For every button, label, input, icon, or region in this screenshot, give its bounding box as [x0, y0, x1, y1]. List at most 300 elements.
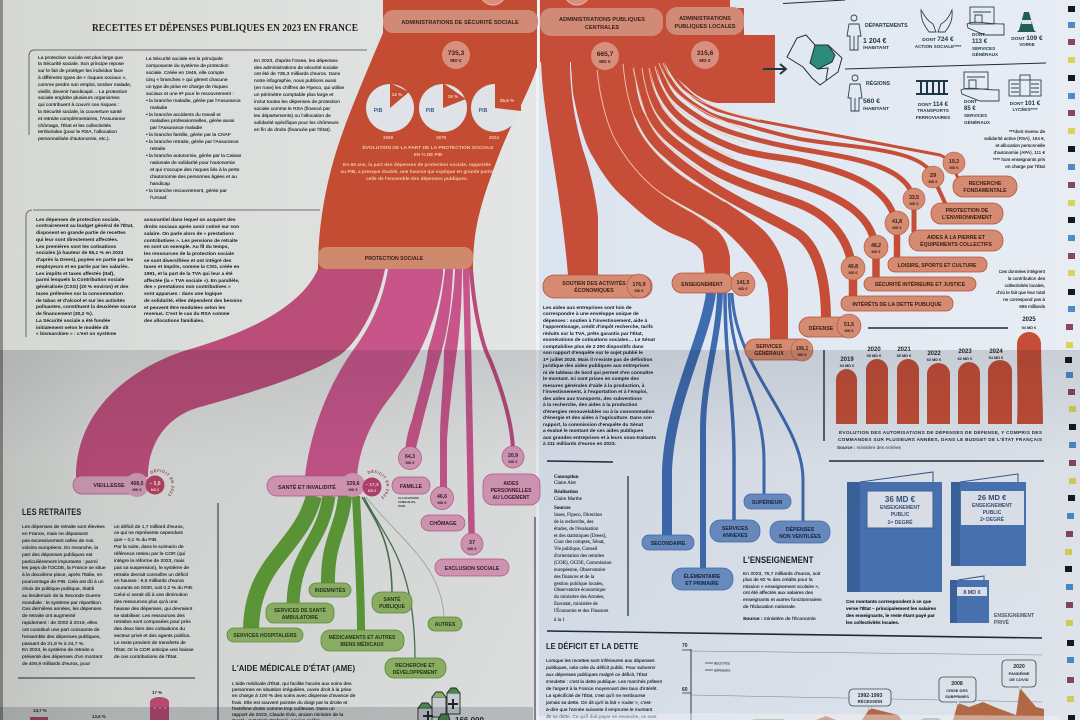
- text block: credits and sources: Insee, Fipeco, Direction: [554, 513, 602, 518]
- pill: exclusion sociale: [435, 533, 509, 576]
- label: action sociale: [915, 36, 961, 49]
- legend: RECETTES: [714, 662, 730, 666]
- text block: financing column 2: assurantiel dans lequel on acquiert des droits sociaux après avoir cotisé sur son salaire. On parle alors de « prestations contributives ». Les pensions de retraite en sont un exemple. Au fil du temps, les ressources de la protection sociale se sont diversifiées et ont intégré des taxes et impôts, comme la CSG, créée en 1991, et la part de la TVA qui leur a été affectée (la « TVA sociale »). En parallèle, des « prestations non contributives » sont apparues : dans une logique de solidarité, elles dépendent des besoins et peuvent être modulées selon les revenus. C'est le cas du RSA comme des allocations familiales.: [144, 218, 242, 324]
- chart caption: Source : ministère des Armées: [837, 445, 902, 450]
- label: transports ferroviaires: DONT 114 €: [918, 101, 949, 108]
- value: 315,6: 315,6: [697, 50, 714, 57]
- pill: médicaments: [321, 630, 404, 651]
- bar 2022: [927, 363, 950, 424]
- label: voirie: VOIRIE: [1019, 42, 1035, 47]
- bar 2019: [836, 369, 857, 424]
- retirement bars: 13,6 %: [92, 714, 106, 719]
- registration colour strip: [1065, 6, 1076, 720]
- label: services généraux région: 85 €: [964, 106, 976, 112]
- pill: famille: 64,3: [405, 454, 415, 460]
- heading: aide médicale d'état: L'AIDE MÉDICALE D'ÉTAT (AME): [232, 663, 355, 673]
- flow: enseignement: [571, 55, 730, 275]
- pill: soutien des activités économiques: [543, 274, 652, 298]
- text block: credits and sources: des finances et de la: [554, 575, 594, 580]
- callout: 2020: DE COVID: [1009, 677, 1029, 682]
- pill: aides personnelles au logement: AIDES: [503, 481, 519, 487]
- flow: services généraux: [597, 55, 788, 341]
- pill: famille: FAMILIALES,: [398, 500, 416, 504]
- pill: administrations publiques locales: ADMINISTRATIONS: [679, 16, 731, 22]
- pill: famille: PAJE: [398, 504, 405, 508]
- icon: traffic cone: [1017, 12, 1036, 32]
- text block: credits and sources: gestion publique locales,: [554, 582, 604, 587]
- pill: recherche fondamentale: RECHERCHE: [969, 181, 1002, 187]
- pill: élémentaire et primaire: [672, 568, 733, 590]
- chart caption: [837, 428, 1042, 450]
- book: enseignement public 2e degré: PUBLIC: [983, 510, 1002, 516]
- value: 665,7: 665,7: [597, 51, 614, 58]
- text block: credits and sources: européenne, Observatoire: [554, 568, 605, 573]
- pill: services généraux: [745, 339, 813, 361]
- pill: santé et invalidité with deficit: SANTÉ ET INVALIDITÉ: [278, 483, 336, 491]
- pill: loisirs, sports et culture: LOISIRS, SPORTS ET CULTURE: [898, 263, 977, 269]
- pill: protection sociale: PROTECTION SOCIALE: [365, 256, 424, 262]
- pill: chômage: 46,6: [437, 494, 447, 500]
- pill: recherche fondamentale: 19,3: [949, 159, 959, 165]
- pill: protection de l'environnement: [922, 166, 1003, 224]
- label: action sociale: DONT 724 €: [922, 36, 954, 43]
- pill: santé et invalidité with deficit: 329,6: [347, 481, 360, 487]
- pill: enseignement: [672, 272, 755, 296]
- label: régions: [863, 79, 890, 112]
- pill: secondaire: SECONDAIRE: [651, 541, 686, 547]
- callout: 1992-1993: [849, 689, 891, 710]
- callout: 1992-1993: 1992-1993: [858, 693, 883, 699]
- note: données locales: Ces données intègrent la contribution des collectivités locales, d'où le fait que leur total ne correspond pas à 665 milliards: [996, 269, 1045, 309]
- pie chart: share of GDP 1978: [419, 83, 467, 140]
- callout: 2008: CRISE DES: [946, 688, 968, 693]
- pill: services annexes: [710, 520, 760, 542]
- label: lycées: LYCÉES****: [1012, 105, 1038, 112]
- pill: aides à la pierre: MD €: [909, 202, 919, 206]
- pill: vieillesse with deficit: [72, 468, 174, 497]
- pill: santé et invalidité with deficit: DÉFICIT EN 2023: [368, 470, 390, 499]
- text block: credits and sources: du ministère des Armées,: [554, 595, 605, 600]
- pill: aides à la pierre: AIDES À LA PIERRE ET: [927, 234, 986, 241]
- pill: indemnités: INDEMNITÉS: [315, 586, 346, 594]
- note: book amounts: Ces montants correspondent à ce que verse l'État – principalement les salaires des enseignants, le reste étant payé par les collectivités locales.: [846, 599, 936, 625]
- pill: exclusion sociale: EXCLUSION SOCIALE: [445, 566, 500, 572]
- flow: central and local public administrations trunk: [540, 0, 775, 103]
- text block: credits and sources: et des statistiques (Drees),: [554, 534, 606, 539]
- pill: services annexes: ANNEXES: [722, 533, 748, 539]
- heading: l'enseignement: L'ENSEIGNEMENT: [743, 555, 814, 565]
- pill: défense: [799, 314, 861, 338]
- bar 2024: [988, 360, 1012, 424]
- book: enseignement public 2e degré: ENSEIGNEMENT: [972, 503, 1012, 509]
- pill: sécurité intérieure et justice: SÉCURITÉ INTÉRIEURE ET JUSTICE: [875, 280, 966, 288]
- label: départements: [863, 21, 908, 51]
- pill: intérêts de la dette publique: INTÉRÊTS DE LA DETTE PUBLIQUE: [852, 300, 942, 308]
- flow separators: [597, 63, 760, 228]
- pill: administrations publiques centrales: CENTRALES: [585, 25, 619, 31]
- pill: chômage: CHÔMAGE: [429, 519, 457, 527]
- pill: services annexes: SERVICES: [722, 526, 749, 532]
- pill: défense: 51,5: [844, 322, 854, 328]
- pill: santé et invalidité with deficit: MD €: [368, 489, 376, 493]
- icon: hand holding building 2: [961, 72, 999, 101]
- pill: soutien des activités économiques: ÉCONOMIQUES: [574, 286, 614, 294]
- pill: aides personnelles au logement: PERSONNELLES: [491, 488, 532, 494]
- pie chart: share of GDP 1978: PIB: [426, 108, 435, 114]
- pill: indemnités: [309, 583, 351, 597]
- pill: protection sociale: [318, 247, 473, 269]
- pill: santé et invalidité with deficit: MD €: [348, 488, 358, 492]
- label: services généraux: GÉNÉRAUX: [972, 50, 999, 57]
- text block: credits and sources: l'Économie et des Finances: [554, 609, 608, 614]
- pill: services de santé ambulatoire: SERVICES DE SANTÉ: [274, 606, 327, 614]
- bar labels: 2024: [989, 349, 1003, 355]
- pill: protection de l'environnement: L'ENVIRONNEMENT: [942, 215, 993, 221]
- pill: services de santé ambulatoire: [266, 603, 334, 623]
- callout: 1992-1993: RÉCESSION: [858, 699, 882, 704]
- pill: soutien des activités économiques: 176,9: [633, 282, 646, 288]
- pill: vieillesse with deficit: MD €: [151, 488, 159, 492]
- pill: protection de l'environnement: PROTECTION DE: [946, 208, 989, 214]
- bar labels: 65 MD €: [897, 353, 912, 358]
- note: dont revenu de solidarité: ***dont revenu de solidarité active (RSA), 164 €, et allocation personnelle d'autonomie (APA), 111 € **** hors enseignants pris en charge par l'État: [984, 129, 1045, 169]
- pill: exclusion sociale: 37: [469, 540, 475, 546]
- bar labels: 94 MD €: [1022, 325, 1037, 330]
- value: 735,3: MD €: [450, 58, 462, 64]
- text block: Insee figures: En 2023, d'après l'Insee, les dépenses des administrations de sécurité sociale ont été de 735,3 milliards d'euros. Dans notre infographie, nous publions aussi (en rose) les chiffres de Fipeco, qui utilise un périmètre comptable plus large et inclut toutes les dépenses de protection sociale comme le RSA (financé par les départements) ou l'allocation de solidarité spécifique pour les chômeurs en fin de droits (financée par l'État).: [254, 59, 344, 133]
- text block: credits and sources: (COR), OCDE, Commission: [554, 561, 612, 566]
- flow: santé et invalidité: [305, 269, 443, 476]
- flow: exclusion sociale: [466, 269, 472, 555]
- pill: médicaments: BIENS MÉDICAUX: [340, 640, 384, 648]
- bar 2025: [1017, 332, 1043, 424]
- text block: credits and sources: Eurostat, ministère de: [554, 602, 598, 607]
- pie chart: share of GDP 1959: [366, 83, 414, 140]
- label: départements: DÉPARTEMENTS: [865, 21, 908, 29]
- pill: aides personnelles au logement: [483, 446, 540, 505]
- pill: enseignement: ENSEIGNEMENT: [681, 282, 724, 288]
- text block: retraites column 1: Les dépenses de retraite sont élevées en France, mais ne dépassent pas excessivement celles de nos voisins européens. En revanche, la part des dépenses publiques est particulièrement importante : parmi les pays de l'OCDE, la France se situe à la deuxième place, après l'Italie, en pourcentage de PIB. Cela est dû à un choix de politique publique, établi au lendemain de la Seconde Guerre mondiale : le système par répartition. Ces dernières années, les dépenses de retraite ont augmenté rapidement : de 2002 à 2019, elles ont constitué une part croissante de l'ensemble des dépenses publiques, passant de 21,8 % à 24,7 %. En 2024, le système de retraite a présenté des dépenses d'un montant de 406,9 milliards d'euros, pour: [22, 525, 106, 667]
- blue pills: education categories: [642, 494, 830, 590]
- retirement bars: 17 %: [152, 690, 162, 695]
- value: 735,3: [442, 41, 470, 69]
- bar 2020: [866, 359, 888, 424]
- pill: administrations de sécurité sociale: ADMINISTRATIONS DE SÉCURITÉ SOCIALE: [401, 18, 519, 26]
- pill: administrations publiques centrales: ADMINISTRATIONS PUBLIQUES: [559, 17, 645, 23]
- icon: school building: [1009, 75, 1041, 96]
- pill: services généraux: MD €: [797, 353, 807, 357]
- bar labels: 62 MD €: [958, 356, 973, 361]
- pill: administrations publiques locales: [666, 7, 744, 35]
- pill: administrations publiques centrales: [540, 8, 663, 36]
- pill: supérieur: SUPÉRIEUR: [752, 498, 782, 506]
- pill: exclusion sociale: MD €: [467, 547, 477, 551]
- pill: recherche et développement: DÉVELOPPEMENT: [393, 668, 437, 676]
- bar labels: 2019: [840, 357, 854, 363]
- label: transports ferroviaires: FERROVIAIRES: [916, 115, 950, 120]
- icon: person département: [847, 15, 861, 50]
- book: enseignement public 1er degré: ENSEIGNEMENT: [880, 505, 920, 511]
- pill: services de santé ambulatoire: AMBULATOIRE: [282, 615, 319, 621]
- arrow to map: [763, 64, 786, 74]
- book: enseignement privé: 8 MD €: [963, 590, 981, 596]
- icon: AME clipboards: [418, 688, 460, 720]
- pill: médicaments: MÉDICAMENTS ET AUTRES: [329, 633, 396, 641]
- pill: autres: AUTRES: [435, 622, 456, 628]
- pie charts caption: au PIB, a presque doublé, une hausse qui explique en grande partie: [340, 169, 494, 174]
- blue flows: enseignement breakdown: [667, 293, 803, 569]
- callout: 2020: PANDÉMIE: [1009, 671, 1030, 676]
- pill: recherche fondamentale: FONDAMENTALE: [963, 188, 1007, 194]
- pie charts caption: ÉVOLUTION DE LA PART DE LA PROTECTION SOCIALE: [362, 143, 494, 150]
- debt chart: [682, 643, 1044, 720]
- book: enseignement public 2e degré: 26 MD €: [978, 493, 1007, 502]
- chart caption: ÉVOLUTION DES AUTORISATIONS DE DÉPENSES DE DÉFENSE, Y COMPRIS DES: [839, 428, 1042, 435]
- pill: services généraux: 106,1: [796, 346, 808, 352]
- pill: aides personnelles au logement: 20,9: [508, 453, 518, 459]
- bar 2021: [897, 359, 919, 424]
- text block: credits and sources: Claire Alet: [554, 481, 576, 486]
- pill: vieillesse with deficit: – 5,8: [149, 481, 161, 487]
- pill: aides personnelles au logement: MD €: [508, 460, 518, 464]
- pill: vieillesse with deficit: MD €: [132, 488, 142, 492]
- pill: dépenses non ventilées: [770, 521, 830, 543]
- source: enseignement: Source : ministère de l'Économie: [743, 617, 816, 622]
- text block: credits and sources: [554, 474, 612, 623]
- chart caption: COMMANDES SUR PLUSIEURS ANNÉES, DANS LE BUDGET DE L'ÉTAT FRANÇAIS: [838, 435, 1042, 442]
- text block: credits and sources: Cour des comptes, Sénat,: [554, 540, 605, 545]
- text block: credits and sources: Sources: [554, 506, 571, 511]
- pill: vieillesse with deficit: DÉFICIT EN 2023: [150, 468, 174, 496]
- text block: credits and sources: d'orientation des retraites: [554, 554, 604, 559]
- pill: administrations de sécurité sociale: [383, 10, 538, 33]
- flow: famille: [405, 269, 453, 458]
- text block: credits and sources: études, de l'évaluation: [554, 527, 598, 532]
- text block: credits and sources: Observatoire économique: [554, 588, 606, 593]
- label: régions: /HABITANT: [863, 106, 889, 112]
- pill: recherche et développement: RECHERCHE ET: [395, 663, 435, 669]
- value: 665,7: MD €: [599, 59, 611, 65]
- legend: [705, 662, 730, 672]
- title: RECETTES ET DÉPENSES PUBLIQUES EN 2023 EN FRANCE: [92, 22, 358, 34]
- pill: supérieur: [744, 494, 791, 509]
- flows: other central and local expenditure: [628, 55, 958, 320]
- bar labels: 60 MD €: [927, 357, 942, 362]
- text block: credits and sources: de la recherche, des: [554, 520, 593, 525]
- pill: recherche fondamentale: [943, 152, 1017, 197]
- pill: santé publique: [372, 592, 412, 613]
- deficit areas: [816, 688, 1044, 720]
- pill: intérêts de la dette publique: 49,8: [848, 264, 858, 270]
- label: services généraux région: DONT: [964, 99, 977, 104]
- value: 735,3: 735,3: [448, 50, 465, 57]
- pill: dépenses non ventilées: NON VENTILÉES: [779, 532, 821, 540]
- retirement bars: 14,7 %: [33, 708, 47, 713]
- label: transports ferroviaires: [916, 101, 950, 120]
- label: services généraux: 113 €: [972, 38, 988, 45]
- debt chart: 60: [682, 687, 688, 693]
- text block: protection sociale definition: La protection sociale est plus large que la Sécurité sociale. Son principe repose sur le fait de protéger les individus face à différents types de « risques sociaux », comme perdre son emploi, tomber malade, vieillir, devenir handicapé… La protection sociale englobe plusieurs organismes qui contribuent à couvrir ces risques : la Sécurité sociale, la couverture santé et retraite complémentaires, l'Assurance chômage, l'État et les collectivités territoriales (pour le RSA, l'allocation personnalisée d'autonomie, etc.).: [38, 56, 131, 142]
- pill: recherche et développement: [385, 658, 446, 678]
- callout: 2020: 2020: [1013, 664, 1025, 670]
- bar labels: 2021: [897, 347, 911, 353]
- pill: famille: FAMILLE: [400, 484, 423, 490]
- legend: DÉPENSES: [714, 668, 730, 672]
- text block: aides aux entreprises: Les aides aux entreprises sont loin de correspondre à une enveloppe unique de dépenses : soutien à l'investissement, aide à l'apprentissage, crédit d'impôt recherche, tarifs réduits sur la TVA, prêts garantis par l'État, exonérations de cotisations sociales… Le Sénat comptabilise plus de 2 200 dispositifs dans son rapport d'enquête sur le sujet publié le 1ᵉʳ juillet 2025. Mais il n'existe pas de définition juridique des aides publiques aux entreprises ni de tableau de bord qui permet d'en connaître le montant. Ici sont prises en compte des mesures générales d'aide à la production, à l'investissement, à l'exportation et à l'emploi, des aides aux transports, des subventions à la recherche, des aides à la production d'énergies renouvelables ou à la consommation d'énergie et des aides à l'agriculture. Dans son rapport, la commission d'enquête du Sénat a évalué le montant de ces aides publiques aux grandes entreprises et à leurs sous-traitants à 211 milliards d'euros en 2023.: [543, 306, 656, 447]
- book: enseignement public 1er degré: PUBLIC: [891, 512, 910, 518]
- label: services généraux: [972, 32, 999, 57]
- pill: enseignement: 141,5: [737, 280, 750, 286]
- panel: local spending per inhabitant: [847, 7, 1043, 125]
- label: voirie: [1011, 35, 1043, 47]
- callout: 2020: [1002, 660, 1036, 690]
- text block: sécurité sociale branches: La Sécurité sociale est la principale composante du système de protection sociale. Créée en 1945, elle compte cinq « branches » qui gèrent chacune un type de prise en charge de risques sociaux et une 6ᵉ pour le recouvrement : • la branche maladie, gérée par l'Assurance maladie • la branche accidents du travail et maladies professionnelles, gérée aussi par l'Assurance maladie • la branche famille, gérée par la CNAF • la branche retraite, gérée par l'Assurance retraite • la branche autonomie, gérée par la Caisse nationale de solidarité pour l'autonomie et qui s'occupe des risques liés à la perte d'autonomie des personnes âgées et au handicap • la branche recouvrement, gérée par l'Urssaf.: [146, 57, 241, 201]
- pill: secondaire: [642, 535, 694, 550]
- text block: credits and sources: Réalisation: [554, 490, 578, 495]
- bar labels: 2025: [1022, 317, 1036, 323]
- pie chart: share of GDP 2024: 26,6 %: [500, 98, 514, 103]
- pill: intérêts de la dette publique: MD €: [848, 271, 858, 275]
- text block: enseignement: En 2023, 75,7 milliards d'euros, soit plus de 92 % des crédits pour la mission « enseignement scolaire », ont été affectés aux salaires des enseignants et autres fonctionnaires de l'Éducation nationale.: [743, 572, 822, 610]
- pill: aides à la pierre: ÉQUIPEMENTS COLLECTIFS: [920, 240, 992, 248]
- label: transports ferroviaires: TRANSPORTS: [917, 108, 949, 113]
- book: enseignement public 1er degré: 1ᵉʳ DEGRÉ: [887, 518, 913, 526]
- pie chart: share of GDP 2024: 2024: [489, 135, 500, 140]
- bar labels: 64 MD €: [989, 355, 1004, 360]
- pie charts caption: celle de l'ensemble des dépenses publiques.: [366, 176, 468, 181]
- book: enseignement privé: PRIVÉ: [994, 618, 1010, 626]
- pill: famille: ALLOCATIONS: [398, 496, 419, 500]
- pill: recherche fondamentale: MD €: [949, 166, 959, 170]
- label: services généraux: SERVICES: [972, 46, 995, 51]
- bar 2023: [958, 362, 980, 424]
- pill: défense: DÉFENSE: [809, 324, 834, 332]
- value: 315,6: MD €: [699, 58, 711, 64]
- pill: santé et invalidité with deficit: [266, 470, 390, 499]
- top clipped rings: [480, 0, 590, 5]
- pill: protection de l'environnement: 29: [930, 173, 936, 179]
- label: départements: 1 204 €: [863, 38, 886, 45]
- flow: aides au logement: [471, 269, 513, 450]
- pill: enseignement: MD €: [738, 287, 748, 291]
- pill: aides à la pierre: 33,5: [909, 195, 919, 201]
- pill: vieillesse with deficit: VIEILLESSE: [93, 483, 125, 489]
- text block: financing column 1: Les dépenses de protection sociale, contrairement au budget général de l'État, disposent en grande partie de recettes qui leur sont directement affectées. Les premières sont les cotisations sociales (à hauteur de 55,1 % en 2023 d'après la Drees), payées en partie par les employeurs et en partie par les salariés. Les impôts et taxes affectés (Itaf), parmi lesquels la Contribution sociale généralisée (CSG) (20 % environ) et des taxes prélevées sur la consommation de tabac et d'alcool et sur les activités polluantes, constituent la deuxième source de financement (30,2 %). La Sécurité sociale a été fondée initialement selon le modèle dit « bismarckien » : c'est un système: [36, 218, 136, 337]
- label: voirie: DONT 109 €: [1011, 35, 1043, 42]
- flow: vieillesse: [76, 269, 385, 477]
- pie chart: share of GDP 1959: 14 %: [392, 92, 402, 97]
- bar labels: 54 MD €: [840, 363, 855, 368]
- pie charts caption: [340, 143, 494, 181]
- pie chart: share of GDP 2024: PIB: [479, 108, 488, 114]
- icon: hand holding building: [967, 7, 1004, 35]
- icon: railway track: [916, 81, 948, 94]
- bar labels: 2020: [867, 347, 881, 353]
- pie chart: share of GDP 2024: [471, 83, 521, 140]
- pill: élémentaire et primaire: ÉLÉMENTAIRE: [684, 572, 721, 580]
- pill: santé publique: PUBLIQUE: [379, 604, 406, 610]
- pill: services généraux: SERVICES: [756, 344, 783, 350]
- pill: services hospitaliers: SERVICES HOSPITALIERS: [233, 633, 297, 639]
- bar labels: 2023: [958, 349, 972, 355]
- pie chart: share of GDP 1959: PIB: [374, 108, 383, 114]
- book: enseignement public 1er degré: [847, 472, 942, 592]
- pie chart: share of GDP 1978: 19 %: [448, 94, 458, 99]
- pill: loisirs, sports et culture: 41,8: [892, 219, 902, 225]
- callout: 2008: 2008: [951, 681, 963, 687]
- flow: social security administrations trunk: [318, 0, 537, 269]
- bar labels: 2022: [927, 351, 941, 357]
- icon: map of France with region highlighted: [787, 35, 842, 85]
- book: enseignement privé: ENSEIGNEMENT: [994, 613, 1034, 619]
- value: 665,7: [591, 42, 619, 70]
- text block: credits and sources: à la 1: [554, 618, 565, 623]
- defense bars chart: [836, 317, 1043, 450]
- pill: soutien des activités économiques: MD €: [634, 289, 644, 293]
- pill: sécurité intérieure et justice: MD €: [871, 250, 881, 254]
- icon: person région: [848, 75, 862, 111]
- label: départements: /HABITANT: [863, 45, 889, 51]
- book: enseignement privé: [950, 576, 1034, 626]
- pill: loisirs, sports et culture: MD €: [892, 226, 902, 230]
- label: lycées: [1010, 100, 1041, 112]
- pill: vieillesse with deficit: 408,5: [131, 481, 144, 487]
- pill: services généraux: GÉNÉRAUX: [754, 349, 784, 357]
- green flows: santé breakdown: [251, 496, 444, 660]
- text block: credits and sources: Conception: [554, 474, 578, 480]
- flow: soutien des activités économiques: [541, 55, 598, 275]
- heading: les retraites: LES RETRAITES: [22, 507, 81, 517]
- book: enseignement public 2e degré: 2ᵉ DEGRÉ: [980, 515, 1005, 523]
- pill: santé et invalidité with deficit: – 17,3: [365, 482, 379, 488]
- callout: 2008: [939, 677, 976, 705]
- text block: credits and sources: Claire Marthe: [554, 497, 582, 502]
- label: action sociale: ACTION SOCIALE****: [915, 44, 961, 49]
- flow: chômage: [440, 269, 462, 490]
- pill: chômage: MD €: [437, 501, 447, 505]
- pill: services hospitaliers: [227, 628, 303, 642]
- debt chart: 70: [682, 643, 688, 649]
- book: enseignement public 2e degré: [951, 474, 1026, 566]
- label: lycées: DONT 101 €: [1010, 100, 1041, 107]
- bar labels: [840, 317, 1037, 368]
- pie chart: share of GDP 1959: 1959: [383, 135, 394, 140]
- icon: hands: [921, 10, 952, 32]
- pill: intérêts de la dette publique: [841, 256, 953, 311]
- heading: le déficit et la dette: LE DÉFICIT ET LA DETTE: [546, 641, 639, 651]
- pill: aides à la pierre: [903, 188, 1003, 251]
- label: régions: 560 €: [863, 98, 880, 105]
- value: 315,6: [691, 41, 719, 69]
- pill: administrations publiques locales: PUBLIQUES LOCALES: [675, 24, 736, 30]
- pie charts caption: En 65 ans, la part des dépenses de protection sociale, rapportée: [343, 162, 491, 167]
- pill: sécurité intérieure et justice: 48,2: [871, 243, 881, 249]
- callout: 2008: SUBPRIMES: [945, 694, 969, 699]
- text block: retraites column 2: un déficit de 1,7 milliard d'euros, ce qui ne représente cependant que – 0,1 % du PIB. Par la suite, dans le scénario de référence retenu par le COR (qui intègre la réforme de 2023, mais pas sa suspension), le système de retraite devrait connaître un déficit en hausse : 6,6 milliards d'euros courants en 2030, soit 0,2 % du PIB. Celui-ci serait dû à une diminution des ressources plus qu'à une hausse des dépenses, qui devraient se stabiliser. Les ressources des retraites sont composées pour près des deux tiers des cotisations du secteur privé et des agents publics. Le reste provient de transferts de l'État. Or le COR anticipe une baisse de ces contributions de l'État.: [114, 525, 194, 660]
- pill: santé publique: SANTÉ: [384, 595, 401, 603]
- pill: chômage: [421, 486, 465, 531]
- retirement bars: [30, 690, 169, 720]
- text block: credits and sources: Vie publique, Conseil: [554, 547, 597, 552]
- label: services généraux région: SERVICES: [964, 113, 987, 118]
- pill: soutien des activités économiques: SOUTIEN DES ACTIVITÉS: [562, 279, 626, 287]
- pill: dépenses non ventilées: DÉPENSES: [786, 525, 815, 533]
- pill: aides personnelles au logement: AU LOGEMENT: [493, 495, 529, 501]
- pie charts caption: EN % DE PIB: [414, 152, 443, 157]
- pill: famille: [392, 446, 430, 508]
- pill: protection de l'environnement: MD €: [928, 180, 938, 184]
- bar labels: 65 MD €: [867, 353, 882, 358]
